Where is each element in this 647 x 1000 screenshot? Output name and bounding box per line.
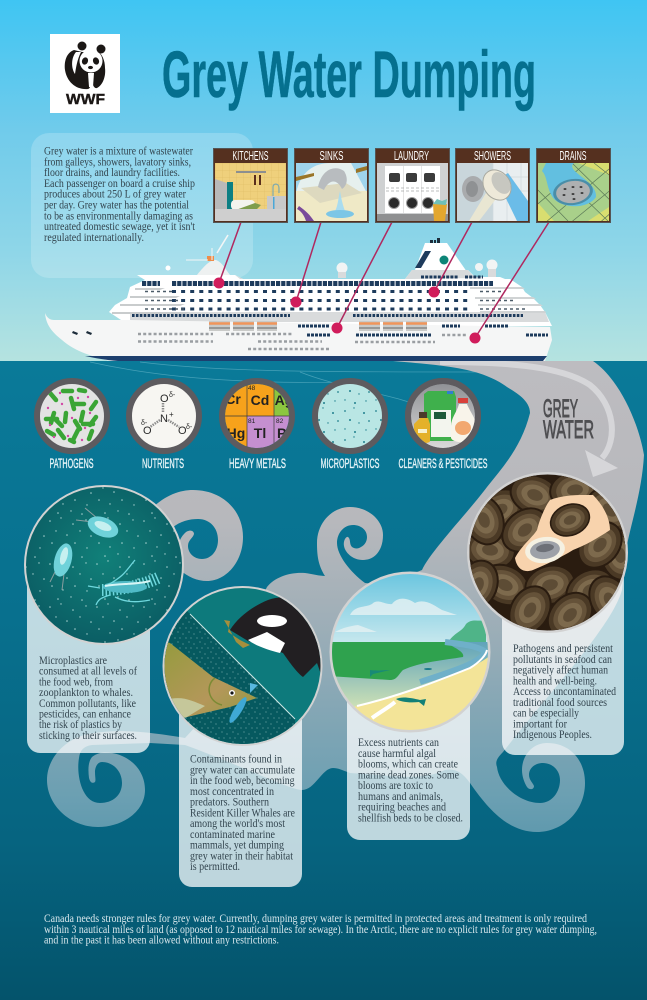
panel: pathogens text: Pathogens and persistent	[513, 643, 614, 655]
panel: nutrients text: marine dead zones. Some	[358, 769, 459, 781]
source card: laundry: LAUNDRY	[394, 148, 429, 163]
panel: pathogens text: important for	[513, 718, 567, 730]
image circle: algal bloom beach	[329, 572, 491, 732]
label: grey water: GREY	[543, 395, 578, 423]
ship funnel and mast	[166, 235, 498, 278]
panel: intro text: regulated internationally.	[44, 232, 144, 244]
pollutant: heavy metals: Cd	[251, 392, 269, 408]
panel: nutrients text	[347, 680, 470, 840]
pollutant labels: MICROPLASTICS	[320, 456, 380, 471]
pollutant: nutrients: +	[169, 410, 174, 419]
panel: intro text: Grey water is a mixture of wastewater	[44, 146, 193, 158]
pollutant labels: CLEANERS & PESTICIDES	[398, 456, 488, 471]
panel: pathogens text: pollutants in seafood can	[513, 654, 612, 666]
panel: contaminants text: predators. Southern	[190, 796, 269, 808]
panel: microplastics text: Microplastics are	[39, 655, 107, 667]
pollutant labels: HEAVY METALS	[229, 456, 286, 471]
panel: intro text: Each passenger on board a cruise ship	[44, 178, 195, 190]
panel: pathogens text: traditional food sources	[513, 697, 607, 709]
panel: contaminants text: Contaminants found in	[190, 754, 282, 766]
panel: microplastics text: pesticides, can enhance	[39, 708, 131, 720]
panel: contaminants text: grey water in their habitat	[190, 850, 294, 862]
source card: showers	[456, 148, 530, 222]
callout lines and dots	[214, 222, 549, 344]
pollutant: heavy metals: Hg	[227, 425, 245, 441]
pollutant labels	[50, 456, 488, 471]
panel: pathogens text: negatively affect human	[513, 664, 608, 676]
pollutant labels: NUTRIENTS	[142, 456, 184, 471]
panel: nutrients text: requiring beaches and	[358, 802, 446, 814]
pollutant: heavy metals: Pb	[277, 425, 295, 441]
pollutant: microplastics	[315, 381, 385, 451]
pollutant: nutrients: δ-	[141, 420, 148, 427]
panel: contaminants text: most concentrated in	[190, 786, 274, 798]
panel: microplastics text: the food web, from	[39, 676, 113, 688]
panel: microplastics text: zooplankton to whales.	[39, 687, 133, 699]
pollutant: pathogens	[37, 381, 107, 451]
cruise ship	[45, 235, 552, 361]
label: grey water	[543, 395, 594, 444]
panel: pathogens text	[502, 550, 624, 755]
panel: nutrients text: blooms are toxic to	[358, 780, 433, 792]
panel: pathogens text: Access to uncontaminated	[513, 686, 616, 698]
source card: kitchens: KITCHENS	[232, 148, 269, 163]
panel: intro text: per day. Grey water has the potential	[44, 200, 189, 212]
panel: contaminants text: is permitted.	[190, 861, 240, 873]
image circle: oysters in hand	[467, 472, 628, 633]
panel: intro text: to be as environmentally damaging as	[44, 210, 193, 222]
source card: showers: SHOWERS	[474, 148, 511, 163]
panel: contaminants text: among the world's most	[190, 818, 286, 830]
panel: intro text: from galleys, showers, lavatory sinks,	[44, 156, 191, 168]
pollutant: nutrients: O	[143, 425, 152, 437]
panel: contaminants text: contaminated marine	[190, 829, 275, 841]
panel: intro text: floor drains, and laundry facilities.	[44, 167, 180, 179]
panel: pathogens text: health and well-being.	[513, 675, 597, 687]
panel: intro text	[31, 133, 253, 278]
panel: microplastics text: Common pollutants, like	[39, 698, 136, 710]
ship superstructure	[109, 270, 552, 326]
panel: microplastics text: consumed at all levels of	[39, 666, 137, 678]
label: grey water: WATER	[543, 416, 594, 444]
source card: sinks: SINKS	[320, 148, 344, 163]
sky background	[0, 0, 647, 361]
logo: WWF panda	[50, 34, 120, 113]
panel: microplastics text: the risk of plastics by	[39, 719, 122, 731]
image circle: zooplankton	[24, 485, 184, 645]
panel: nutrients text: Excess nutrients can	[358, 737, 439, 749]
ship balconies	[209, 321, 427, 331]
pollutant: nutrients: N	[160, 413, 168, 425]
pollutant labels: PATHOGENS	[50, 456, 94, 471]
source card: kitchens	[214, 148, 288, 222]
panel: microplastics text: sticking to their surfaces.	[39, 730, 137, 742]
pollutant: heavy metals	[220, 380, 295, 452]
pollutant: heavy metals: Tl	[254, 425, 266, 441]
panel: intro text: produces about 250 L of grey water	[44, 189, 186, 201]
ship wake lines	[90, 362, 480, 405]
pollutant: heavy metals: Cr	[225, 391, 241, 407]
panel: contaminants text: Resident Killer Whales are	[190, 807, 295, 819]
panel: contaminants text: in the food web, becoming	[190, 775, 295, 787]
pollutant: heavy metals: 82	[276, 418, 284, 425]
pollutant: nutrients: δ-	[186, 424, 193, 431]
panel: nutrients text: cause harmful algal	[358, 748, 436, 760]
panel: pathogens text: can be especially	[513, 708, 579, 720]
pollutant: nutrients: O	[160, 393, 169, 405]
panel: nutrients text: blooms, which can create	[358, 758, 458, 770]
grey water plume with tentacles	[47, 361, 644, 832]
panel: nutrients text: shellfish beds to be closed.	[358, 812, 463, 824]
panel: intro text: untreated domestic sewage, yet it isn't	[44, 221, 196, 233]
ocean background	[0, 361, 647, 1000]
pollutant: heavy metals: 81	[248, 418, 256, 425]
source card: laundry	[376, 148, 450, 222]
panel: contaminants text: mammals, yet dumping	[190, 840, 284, 852]
pollutant: nutrients	[129, 381, 199, 451]
pollutant: nutrients: O	[178, 425, 187, 437]
source card: sinks	[294, 148, 368, 222]
pollutant: heavy metals: 48	[248, 385, 256, 392]
panel: pathogens text: Indigenous Peoples.	[513, 729, 592, 741]
image circle: orca and salmon	[160, 584, 330, 750]
logo: WWF panda: WWF	[66, 91, 105, 108]
pollutant: heavy metals: Ag	[275, 392, 293, 408]
panel: contaminants text	[179, 690, 302, 887]
panel: contaminants text: grey water can accumulate	[190, 764, 295, 776]
ship hull	[45, 313, 552, 361]
closing text	[44, 913, 597, 946]
source card: drains	[533, 148, 613, 233]
closing text: and in the past it has been allowed without any restrictions.	[44, 934, 279, 946]
closing text: Canada needs stronger rules for grey water. Currently, dumping grey water is permitted in protected areas and treatment is only required	[44, 913, 587, 925]
pollutant: cleaners and pesticides	[408, 381, 478, 451]
panel: nutrients text: humans and animals,	[358, 791, 443, 803]
pollutant: nutrients: δ-	[169, 392, 176, 399]
grey water arrow	[440, 362, 618, 477]
source card: drains: DRAINS	[560, 148, 587, 163]
panel: microplastics text	[27, 545, 150, 753]
curl: upper left	[150, 490, 243, 581]
